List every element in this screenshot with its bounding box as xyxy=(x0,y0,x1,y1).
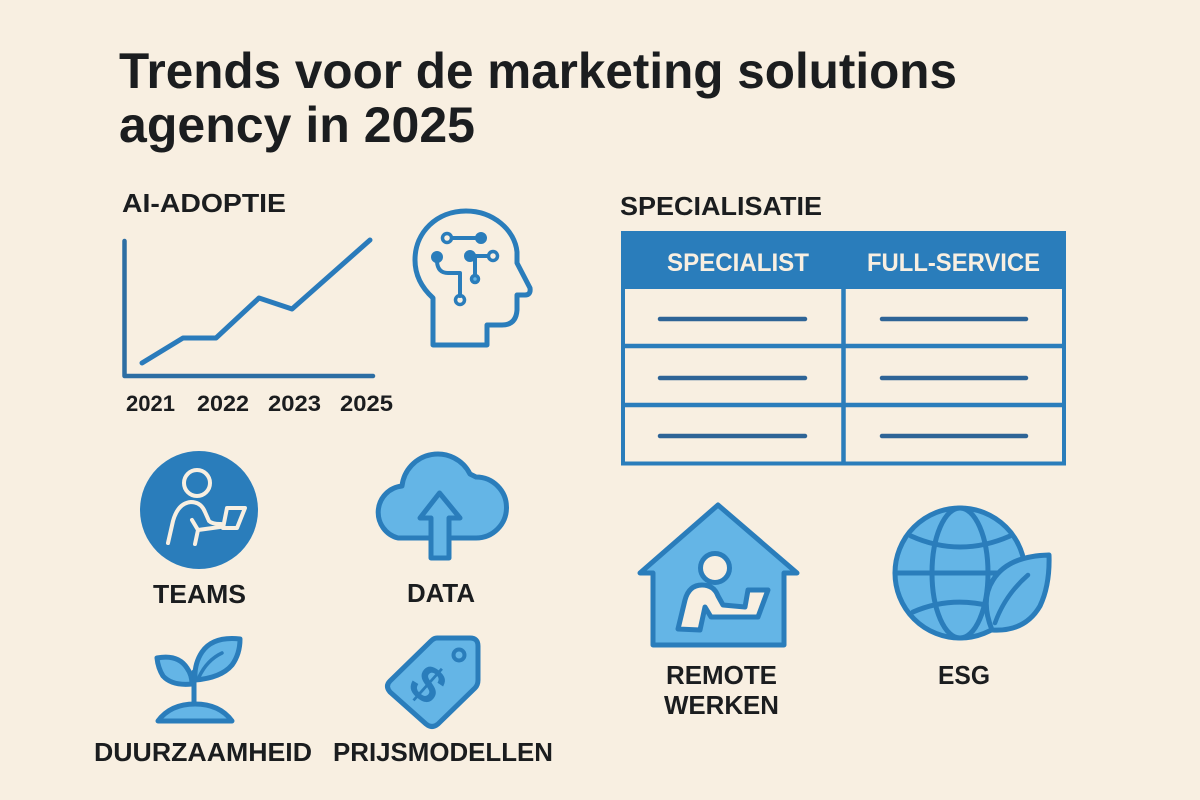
title: agency in 2025 xyxy=(119,97,475,153)
line chart xyxy=(124,240,373,376)
table header labels: FULL-SERVICE xyxy=(867,249,1040,277)
chart year labels: 2022 xyxy=(197,391,249,416)
table header labels xyxy=(667,249,1040,277)
label xyxy=(664,660,779,720)
item: remote werken xyxy=(640,505,797,720)
label: DATA xyxy=(407,578,475,608)
label: PRIJSMODELLEN xyxy=(333,737,553,767)
icon: house with person xyxy=(640,505,797,645)
icon: price tag: $ xyxy=(397,654,458,716)
label: DUURZAAMHEID xyxy=(94,737,312,767)
item: teams xyxy=(140,451,258,609)
icon: person with laptop xyxy=(140,451,258,569)
chart year labels xyxy=(126,391,393,416)
label: TEAMS xyxy=(153,579,246,609)
chart year labels: 2023 xyxy=(268,391,321,416)
panel: specialisatie xyxy=(620,191,1066,465)
item: ESG xyxy=(895,508,1049,690)
label: REMOTE xyxy=(666,660,777,690)
panel: AI-adoptie xyxy=(122,188,530,416)
chart year labels: 2021 xyxy=(126,391,175,416)
item: prijsmodellen xyxy=(333,638,553,767)
heading: AI-adoptie: AI-ADOPTIE xyxy=(122,188,286,218)
label: WERKEN xyxy=(664,690,779,720)
comparison table xyxy=(621,231,1066,465)
title xyxy=(119,43,957,153)
icon: globe with leaf xyxy=(895,508,1049,638)
table header labels: SPECIALIST xyxy=(667,249,809,277)
icon: sprout xyxy=(157,639,240,721)
item: data xyxy=(378,454,506,608)
item: duurzaamheid xyxy=(94,639,312,767)
chart year labels: 2025 xyxy=(340,391,393,416)
icon: cloud upload xyxy=(378,454,506,558)
icon: AI head xyxy=(415,211,530,345)
heading: specialisatie: SPECIALISATIE xyxy=(620,191,822,221)
table placeholder rows xyxy=(660,319,1026,436)
icon: price tag xyxy=(388,638,478,726)
label: ESG xyxy=(938,660,990,690)
title: Trends voor de marketing solutions xyxy=(119,43,957,99)
